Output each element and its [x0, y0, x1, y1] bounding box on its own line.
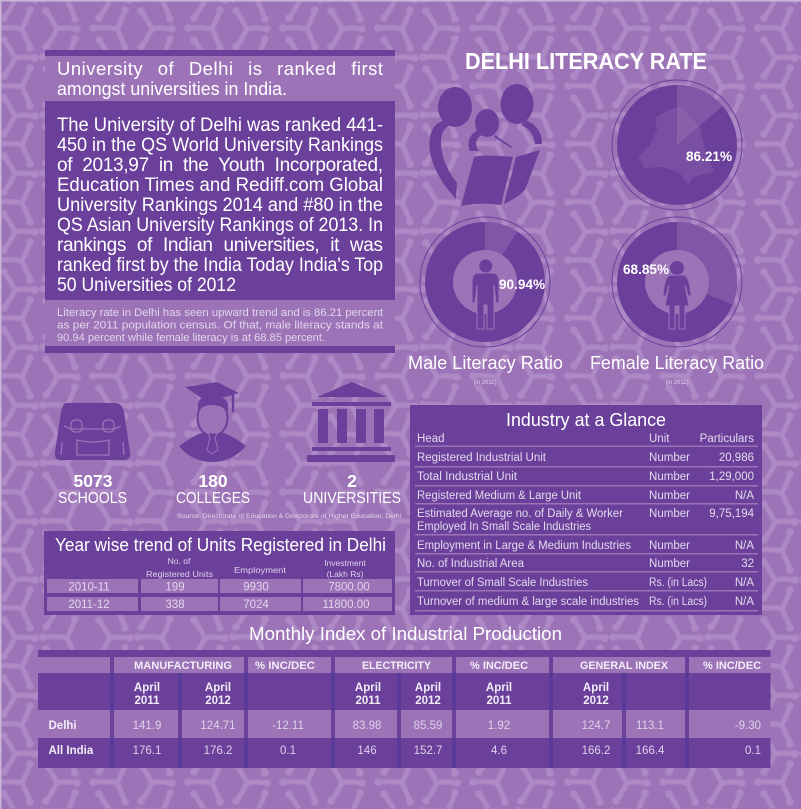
- stat: schools: 5073: [74, 471, 113, 491]
- literacy summary text: [57, 307, 384, 344]
- title: Delhi literacy rate: DELHI LITERACY RATE: [465, 48, 707, 74]
- table: monthly index of industrial production: [38, 650, 770, 768]
- ranking text block: The University of Delhi was ranked 441-: [57, 115, 383, 136]
- stat: colleges: [176, 471, 250, 507]
- icon: university building: [307, 382, 395, 462]
- column headers: [134, 660, 761, 672]
- icon: woman: [663, 261, 691, 329]
- table header row: Investment: [324, 558, 366, 568]
- row: All India: All India: [48, 745, 94, 757]
- ranking text block: QS Asian University Rankings of 2013. In: [57, 215, 383, 236]
- column headers: MANUFACTURING: [134, 660, 232, 672]
- row: Delhi: 85.59: [414, 720, 442, 732]
- row: Delhi: Delhi: [48, 720, 77, 732]
- chart: Delhi literacy 86.21%: 86.21%: [686, 148, 733, 164]
- row: Delhi: 124.71: [200, 720, 236, 732]
- table header row: Employment: [234, 565, 287, 575]
- table rows: Estimated Average no. of Daily & Worker: [417, 508, 623, 520]
- table rows: 9,75,194: [709, 508, 755, 520]
- label: female literacy ratio: Female Literacy Ratio: [590, 352, 764, 373]
- ranking text block: of 2013,97 in the Youth Incorporated,: [57, 155, 383, 176]
- chart: female literacy 68.85%: 68.85%: [623, 261, 670, 277]
- ranking text block: 450 in the QS World University Rankings: [57, 135, 383, 156]
- table rows: 32: [741, 558, 754, 570]
- table rows: [417, 433, 755, 608]
- stat: universities: UNIVERSITIES: [303, 490, 401, 507]
- chart: male literacy 90.94%: 90.94%: [499, 276, 546, 292]
- ranking text block: University Rankings 2014 and #80 in the: [57, 195, 383, 216]
- table rows: Number: [649, 490, 690, 502]
- table rows: Registered Medium & Large Unit: [417, 490, 582, 502]
- table rows: Registered Industrial Unit: [417, 452, 547, 464]
- stat: colleges: 180: [198, 471, 228, 491]
- table rows: N/A: [735, 490, 754, 502]
- panel: year wise trend table: [44, 531, 395, 615]
- panel: university ranking: [45, 50, 395, 353]
- period headers: 2012: [415, 695, 441, 707]
- table rows: 11800.00: [322, 599, 370, 611]
- period headers: 2011: [356, 695, 381, 707]
- source note: Source: Directorate of Education & Directorate of Higher Education, Delhi: [177, 513, 401, 520]
- row: Delhi: 124.7: [582, 720, 610, 732]
- table rows: 7024: [243, 599, 269, 611]
- stat: universities: 2: [347, 471, 357, 491]
- table rows: Rs. (in Lacs): [649, 577, 707, 589]
- column headers: ELECTRICITY: [362, 660, 432, 672]
- icon: graduate: [179, 382, 246, 462]
- table heading: Year wise trend of Units Registered in Delhi: [55, 534, 386, 555]
- table rows: No. of Industrial Area: [417, 558, 525, 570]
- ranking text block: Education Times and Rediff.com Global: [57, 175, 383, 196]
- label: male literacy ratio: (in 2011): [473, 380, 497, 386]
- table rows: 2011-12: [68, 599, 110, 611]
- row: Delhi: 141.9: [133, 720, 161, 732]
- table rows: Employed In Small Scale Industries: [417, 521, 591, 533]
- row: Delhi: -9.30: [735, 720, 761, 732]
- table rows: [47, 579, 392, 611]
- row: All India: 176.2: [204, 745, 232, 757]
- row: All India: 0.1: [280, 745, 296, 757]
- row: Delhi: 113.1: [636, 720, 664, 732]
- row: All India: 146: [357, 745, 377, 757]
- table rows: Head: [417, 433, 444, 445]
- chart: male literacy 90.94%: [420, 217, 550, 347]
- row: All India: 4.6: [491, 745, 507, 757]
- table header row: [146, 556, 366, 579]
- row: All India: [48, 745, 761, 757]
- table rows: N/A: [735, 540, 754, 552]
- period headers: April: [205, 682, 231, 694]
- literacy summary text: 90.94 percent while female literacy is at 68.85 percent.: [57, 332, 325, 344]
- table rows: 199: [165, 582, 185, 594]
- icon: man: [472, 260, 499, 329]
- period headers: 2012: [205, 695, 231, 707]
- row: Delhi: -12.11: [272, 720, 304, 732]
- period headers: April: [486, 682, 512, 694]
- table rows: Number: [649, 540, 690, 552]
- stat: schools: [58, 471, 127, 507]
- table rows: Number: [649, 558, 690, 570]
- table rows: 9930: [243, 582, 269, 594]
- period headers: 2011: [487, 695, 512, 707]
- table rows: 338: [165, 599, 185, 611]
- table rows: 1,29,000: [709, 471, 754, 483]
- chart: female literacy 68.85%: [612, 217, 742, 347]
- table rows: 2010-11: [68, 582, 110, 594]
- table header row: Registered Units: [146, 569, 213, 579]
- period headers: 2012: [583, 695, 609, 707]
- ranking text block: rankings of Indian universities, it was: [57, 235, 383, 256]
- row: Delhi: 1.92: [488, 720, 510, 732]
- period headers: April: [134, 682, 160, 694]
- label: male literacy ratio: Male Literacy Ratio: [408, 352, 563, 373]
- period headers: April: [415, 682, 441, 694]
- ranking text block: [45, 101, 395, 300]
- period headers: 2011: [135, 695, 160, 707]
- row: Delhi: [48, 720, 761, 732]
- column headers: % INC/DEC: [470, 660, 528, 672]
- stat: colleges: COLLEGES: [176, 490, 250, 507]
- row: All India: 166.4: [636, 745, 665, 757]
- table rows: Number: [649, 452, 690, 464]
- table rows: 20,986: [719, 452, 754, 464]
- table rows: Rs. (in Lacs): [649, 596, 707, 608]
- table rows: N/A: [735, 596, 754, 608]
- literacy summary text: as per 2011 population census. Of that, male literacy stands at: [57, 320, 384, 332]
- table rows: Total Industrial Unit: [417, 471, 518, 483]
- column headers: % INC/DEC: [255, 660, 315, 672]
- table rows: Number: [649, 471, 690, 483]
- table rows: Number: [649, 508, 690, 520]
- row: All India: 152.7: [414, 745, 442, 757]
- table rows: Unit: [649, 433, 670, 445]
- icon: family reading: [429, 84, 542, 206]
- row: All India: 0.1: [745, 745, 761, 757]
- heading: university ranked first: University of Delhi is ranked first: [57, 58, 383, 79]
- table heading: Industry at a Glance: [506, 409, 666, 430]
- column headers: GENERAL INDEX: [580, 660, 669, 672]
- ranking text block: ranked first by the India Today India's Top: [57, 255, 383, 276]
- panel: industry at a glance: [410, 405, 762, 615]
- row: All India: 166.2: [582, 745, 610, 757]
- icon: Delhi map: [638, 107, 715, 185]
- period headers: April: [583, 682, 609, 694]
- table rows: Particulars: [700, 433, 754, 445]
- row: All India: 176.1: [133, 745, 161, 757]
- stat: universities: [303, 471, 401, 507]
- table rows: 7800.00: [328, 582, 370, 594]
- heading: university ranked first: amongst universities in India.: [57, 78, 287, 99]
- column headers: % INC/DEC: [703, 660, 761, 672]
- label: female literacy ratio: (in 2011): [665, 380, 689, 386]
- table header row: (Lakh Rs): [327, 569, 364, 579]
- table rows: Employment in Large & Medium Industries: [417, 540, 631, 552]
- heading: monthly index: Monthly Index of Industrial Production: [249, 623, 562, 644]
- icon: school bag: [55, 403, 130, 460]
- literacy summary text: Literacy rate in Delhi has seen upward trend and is 86.21 percent: [57, 307, 384, 319]
- table rows: Turnover of Small Scale Industries: [417, 577, 588, 589]
- stat: schools: SCHOOLS: [58, 490, 127, 507]
- period headers: [134, 682, 609, 707]
- table rows: N/A: [735, 577, 754, 589]
- period headers: April: [355, 682, 381, 694]
- row: Delhi: 83.98: [353, 720, 381, 732]
- table rows: Turnover of medium & large scale industries: [417, 596, 639, 608]
- ranking text block: 50 Universities of 2012: [57, 275, 236, 296]
- label: female literacy ratio: [590, 352, 764, 386]
- label: male literacy ratio: [408, 352, 563, 386]
- chart: Delhi literacy 86.21%: [612, 80, 742, 210]
- table header row: No. of: [168, 556, 191, 566]
- heading: university ranked first: [57, 58, 383, 99]
